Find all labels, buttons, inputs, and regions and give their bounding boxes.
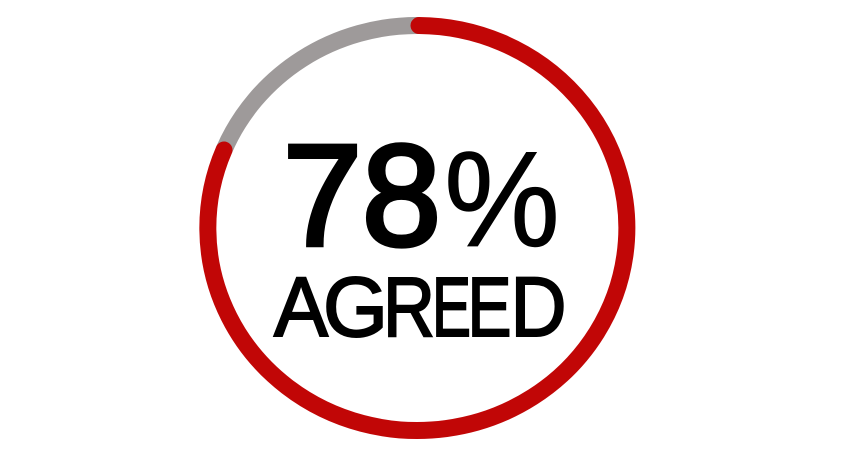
big number: 78% [283,115,560,276]
percent sign: % [444,123,560,275]
ring segment: 78% in red [208,26,627,430]
label: AGREED: E [432,260,471,354]
label: AGREED: E [468,260,512,354]
label: AGREED: A [274,260,328,354]
label: AGREED: D [510,260,566,354]
label: AGREED: R [383,260,435,354]
label: AGREED [274,260,566,354]
label: AGREED: G [323,260,388,354]
ring segment: remaining 22% in grey [224,25,419,150]
chart ring [208,25,627,430]
number 78: 78 [283,115,441,276]
